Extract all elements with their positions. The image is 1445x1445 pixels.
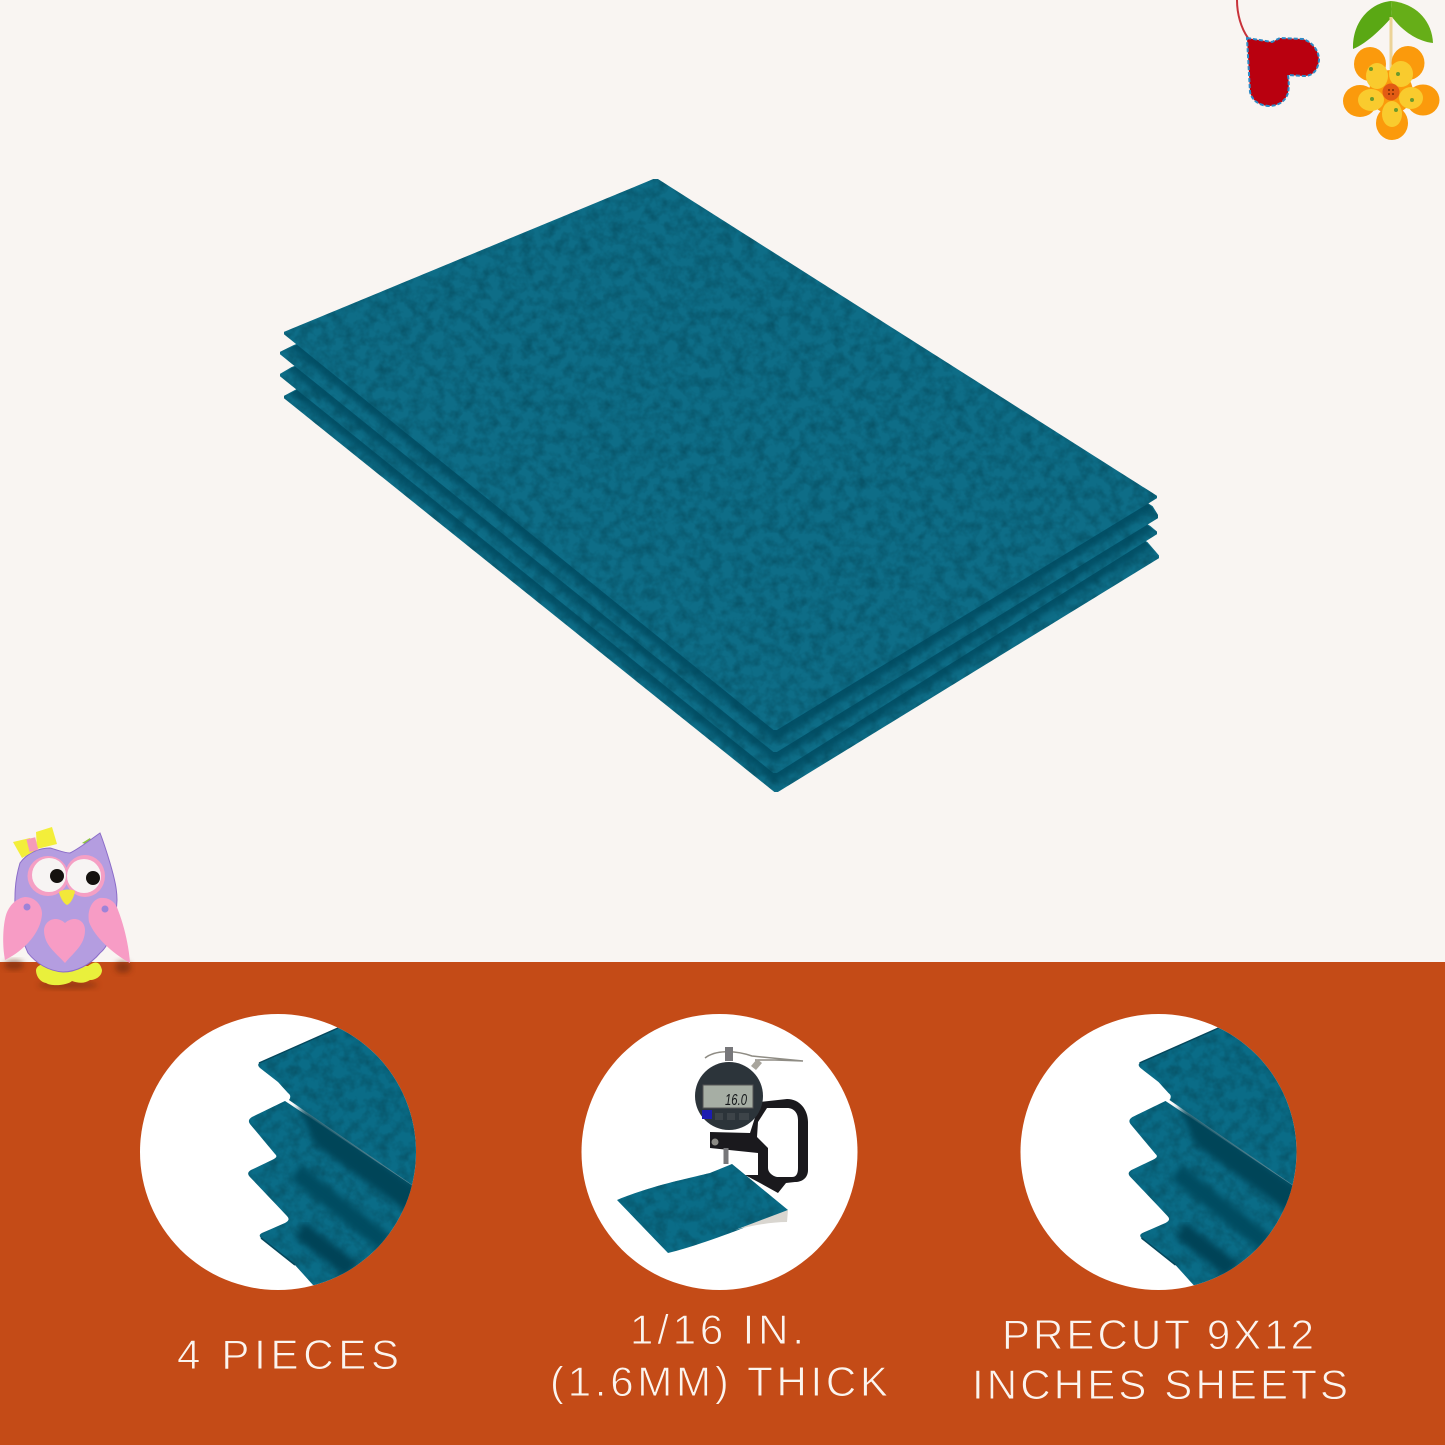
caption: thickness: (1.6MM) THICK [550,1358,888,1405]
icon: red felt heart ornament [1237,0,1319,106]
felt sample sheet [617,1164,788,1253]
caption: sheet size [972,1311,1348,1408]
felt sheet edges close-up [248,1000,440,1320]
caption: sheet size: PRECUT 9X12 [1002,1311,1314,1358]
caption: sheet size: INCHES SHEETS [972,1361,1348,1408]
panel: thickness gauge circle [582,1014,858,1290]
icon: felt owl [3,827,131,989]
caption: thickness: 1/16 IN. [630,1306,804,1353]
white circle [582,1014,858,1290]
icon: digital thickness gauge: 16.0 [725,1092,747,1109]
icon: digital thickness gauge [695,1047,808,1193]
caption: 4 pieces: 4 PIECES [177,1331,399,1378]
white circle [140,1014,416,1290]
caption: thickness [550,1306,888,1405]
panel: 4 pieces circle [140,1000,440,1320]
product: stack of four felt sheets [280,179,1159,792]
orange footer band [0,962,1445,1445]
sample sheet curl [735,1210,788,1230]
panel: precut sheets circle [1020,1000,1320,1320]
icon: felt flower with green leaves [1343,1,1440,140]
